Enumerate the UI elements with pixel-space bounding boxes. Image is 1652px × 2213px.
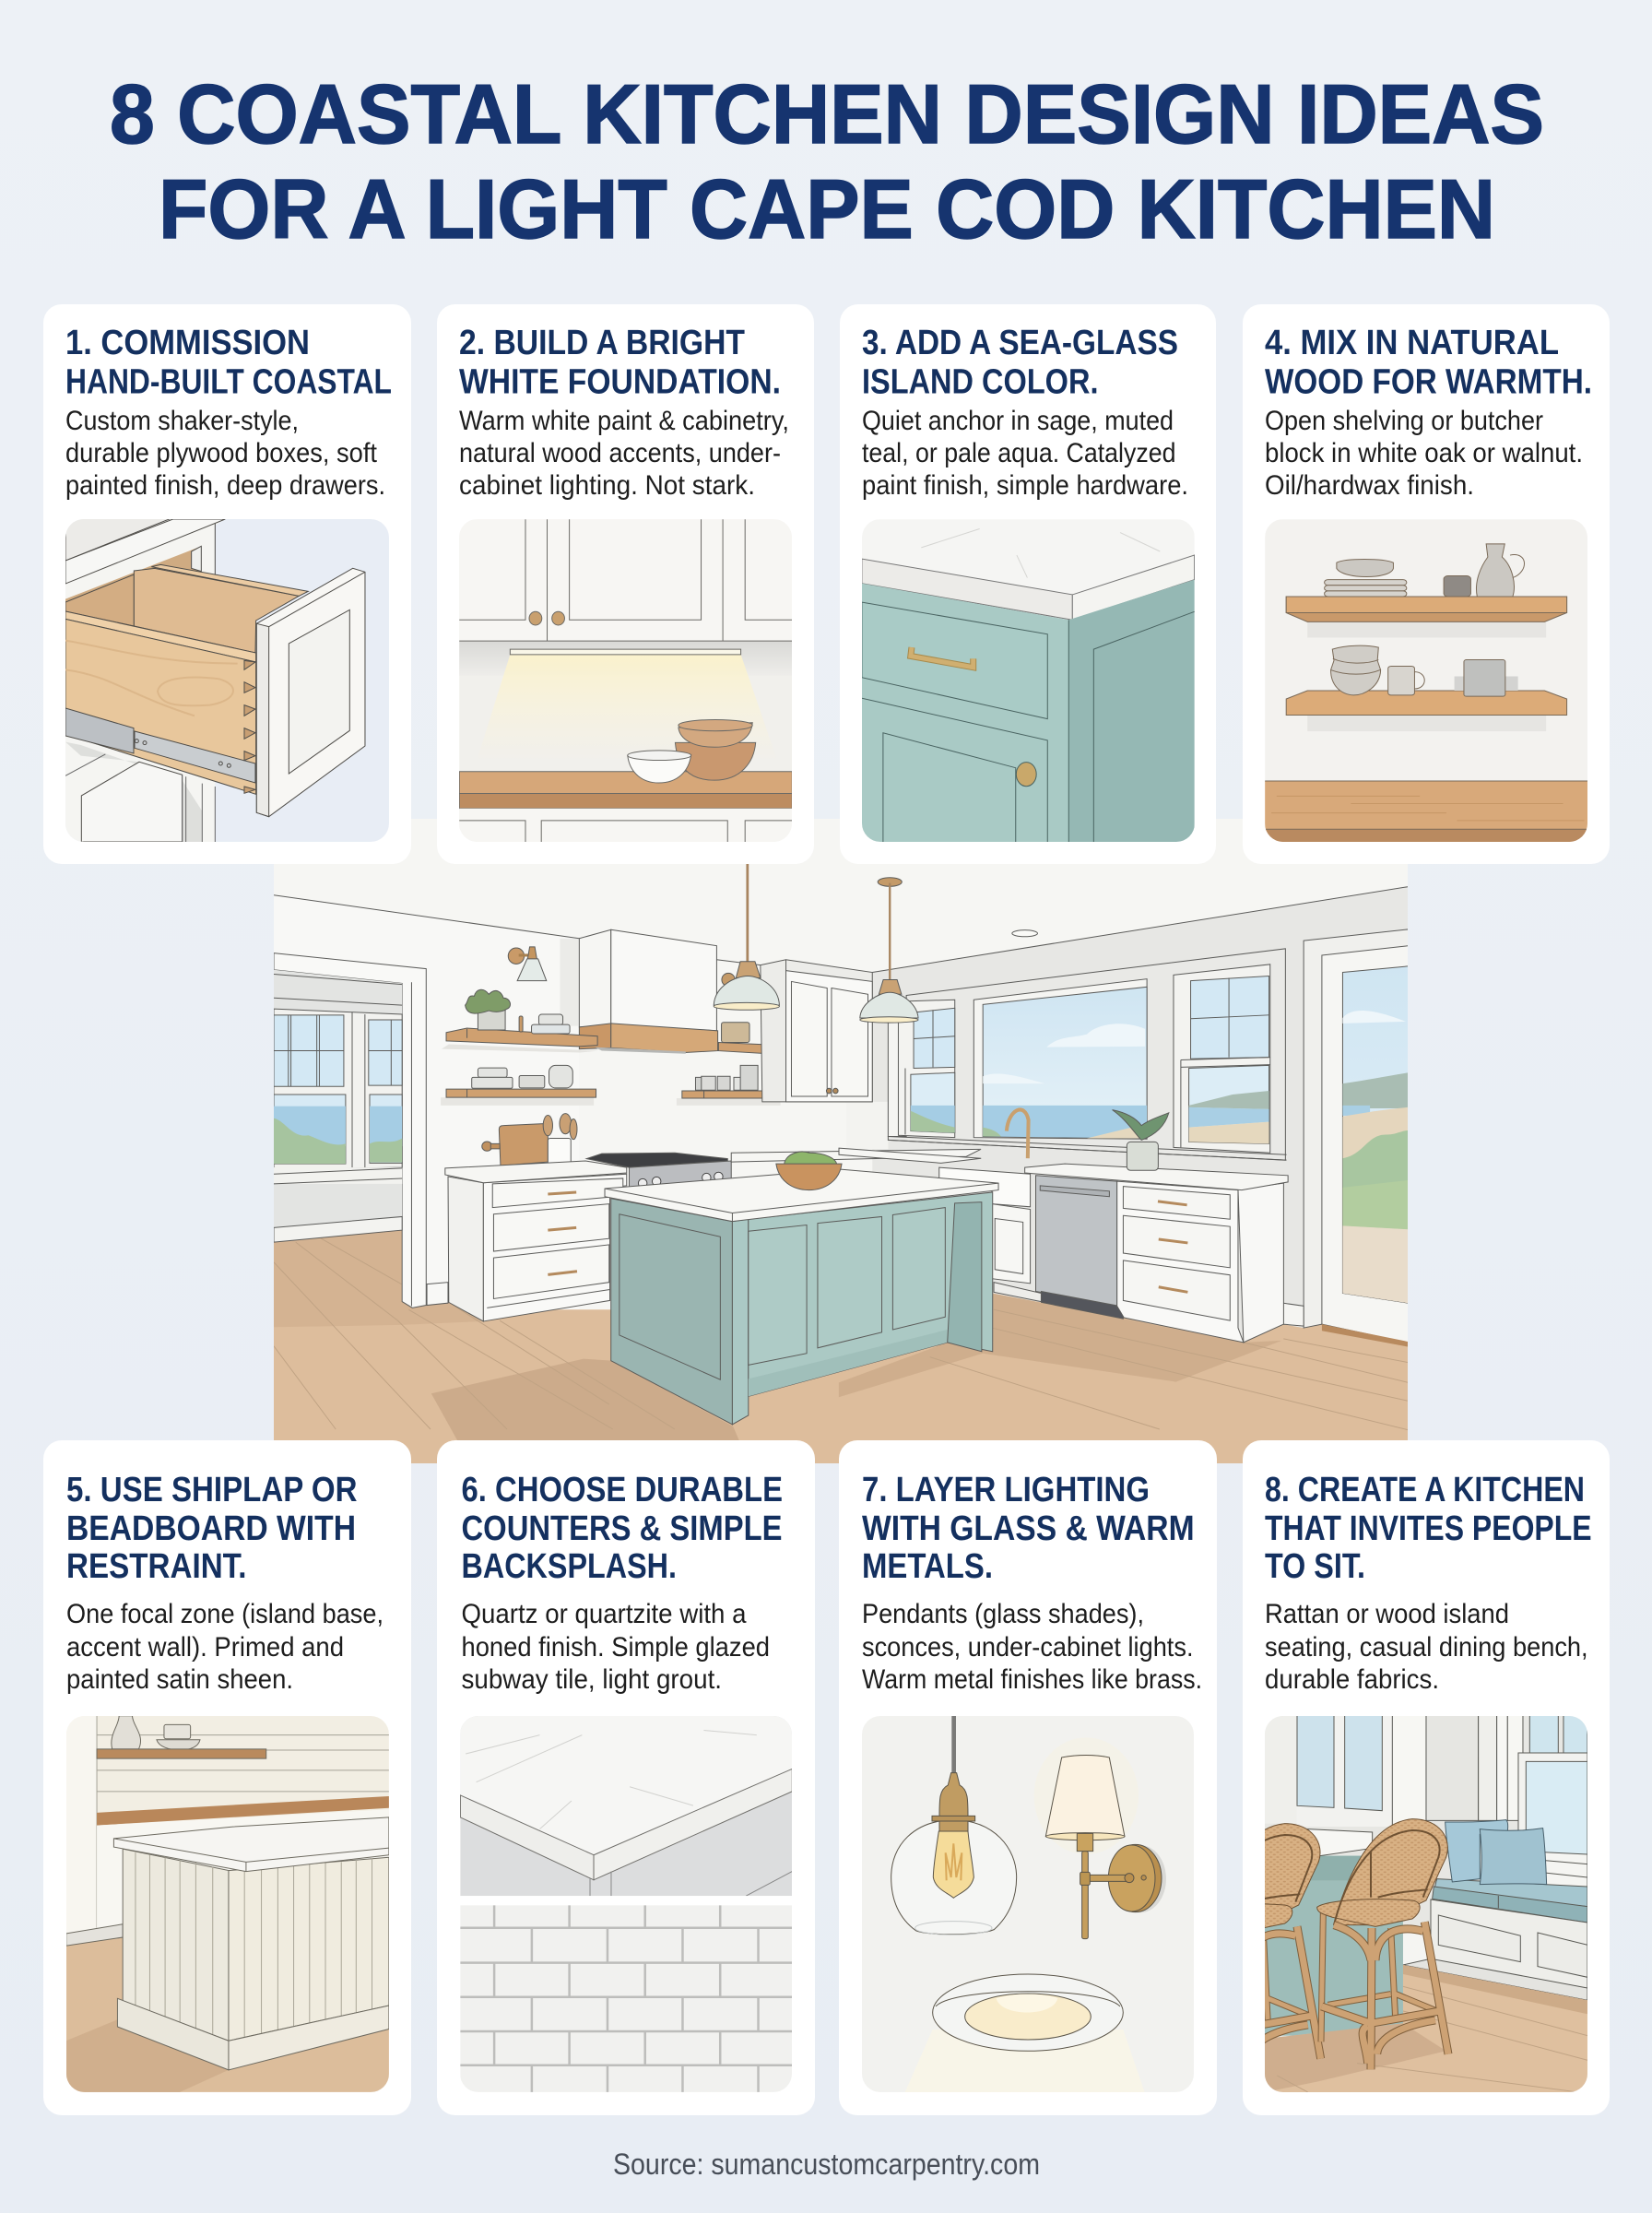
description: Warm metal finishes like brass. <box>862 1664 1202 1695</box>
description: Quiet anchor in sage, muted <box>862 406 1174 436</box>
back counter and sink <box>839 1148 1041 1302</box>
heading <box>1265 1471 1592 1586</box>
title <box>110 68 1544 256</box>
illustration: rattan stools and window bench <box>1189 1714 1587 2092</box>
description: block in white oak or walnut. <box>1265 438 1583 468</box>
left and back walls <box>274 894 761 1025</box>
panel: idea 7 <box>839 1440 1217 2115</box>
pendant light 1 <box>714 864 780 1011</box>
heading <box>459 324 781 402</box>
range <box>586 1153 731 1188</box>
panel: idea 4 <box>1243 304 1610 864</box>
heading: BACKSPLASH. <box>461 1547 677 1586</box>
description: Rattan or wood island <box>1265 1599 1509 1629</box>
description: Warm white paint & cabinetry, <box>459 406 789 436</box>
central kitchen illustration <box>274 814 1440 1477</box>
heading: 8. CREATE A KITCHEN <box>1265 1471 1585 1509</box>
description: painted satin sheen. <box>66 1664 293 1695</box>
heading: 6. CHOOSE DURABLE <box>461 1471 783 1509</box>
heading: ISLAND COLOR. <box>862 363 1099 402</box>
panel: idea 3 <box>840 304 1216 864</box>
cutting board and utensils <box>482 1114 577 1166</box>
sea-glass island <box>605 1169 998 1425</box>
description <box>459 406 789 501</box>
potted plant on shelf <box>466 989 511 1030</box>
illustration: wooden shelves <box>1265 519 1588 842</box>
heading: COUNTERS & SIMPLE <box>461 1509 782 1548</box>
illustration: sea-glass cabinet <box>862 519 1195 842</box>
brass faucet <box>1007 1109 1029 1158</box>
description <box>65 406 385 501</box>
recessed ceiling light <box>1012 930 1037 937</box>
baseboard <box>427 1283 448 1306</box>
right wall <box>872 887 1415 1348</box>
heading: METALS. <box>862 1547 993 1586</box>
description <box>862 406 1188 501</box>
heading: WHITE FOUNDATION. <box>459 363 781 402</box>
right base cabinets <box>1025 1164 1288 1343</box>
window alcove <box>274 953 426 1308</box>
description <box>862 1599 1202 1695</box>
back counter <box>731 1149 981 1162</box>
title: FOR A LIGHT CAPE COD KITCHEN <box>159 163 1495 256</box>
left base cabinets <box>445 1161 627 1321</box>
left sash window <box>888 1000 955 1138</box>
description: Open shelving or butcher <box>1265 406 1543 436</box>
description: painted finish, deep drawers. <box>65 470 385 501</box>
heading <box>65 324 392 402</box>
heading: 1. COMMISSION <box>65 324 310 362</box>
description: Oil/hardwax finish. <box>1265 470 1474 501</box>
heading: WITH GLASS & WARM <box>862 1509 1195 1548</box>
heading: BEADBOARD WITH <box>66 1509 356 1548</box>
description: accent wall). Primed and <box>66 1632 344 1663</box>
description: seating, casual dining bench, <box>1265 1632 1588 1663</box>
panel: idea 8 <box>1189 1440 1610 2115</box>
description: paint finish, simple hardware. <box>862 470 1188 501</box>
corner wall beside sink <box>872 1102 889 1149</box>
heading <box>862 324 1178 402</box>
illustration: under-cabinet light <box>459 519 792 842</box>
panel: idea 2 <box>437 304 814 864</box>
description: Custom shaker-style, <box>65 406 299 436</box>
panel: idea 6 <box>437 1440 815 2115</box>
description: durable fabrics. <box>1265 1664 1439 1695</box>
description: sconces, under-cabinet lights. <box>862 1632 1193 1663</box>
description <box>66 1599 384 1695</box>
description: Pendants (glass shades), <box>862 1599 1144 1629</box>
heading: 4. MIX IN NATURAL <box>1265 324 1559 362</box>
illustration: lighting fixtures <box>862 1716 1194 2092</box>
description: subway tile, light grout. <box>461 1664 722 1695</box>
heading: WOOD FOR WARMTH. <box>1265 363 1592 402</box>
glass door with beach view <box>1283 929 1415 1347</box>
heading: 2. BUILD A BRIGHT <box>459 324 745 362</box>
panel: idea 5 <box>43 1440 411 2115</box>
description: teal, or pale aqua. Catalyzed <box>862 438 1176 468</box>
open wood shelves <box>441 1028 781 1106</box>
heading: RESTRAINT. <box>66 1547 247 1586</box>
description: natural wood accents, under- <box>459 438 781 468</box>
panel: idea 1 <box>43 304 411 864</box>
description <box>1265 1599 1588 1695</box>
fruit bowl <box>776 1152 842 1190</box>
description: durable plywood boxes, soft <box>65 438 378 468</box>
description: Quartz or quartzite with a <box>461 1599 747 1629</box>
heading <box>461 1471 783 1586</box>
description <box>461 1599 770 1695</box>
description <box>1265 406 1583 501</box>
wood floor <box>274 1230 1440 1477</box>
shelf dishes <box>472 1014 758 1090</box>
dishwasher <box>1036 1176 1123 1319</box>
description: honed finish. Simple glazed <box>461 1632 770 1663</box>
window surround <box>888 949 1285 1160</box>
description: One focal zone (island base, <box>66 1599 384 1629</box>
potted fern <box>1113 1110 1169 1170</box>
illustration: quartz counter and subway tile <box>460 1716 792 2092</box>
right double-hung window <box>888 964 1287 1160</box>
heading: 5. USE SHIPLAP OR <box>66 1471 358 1509</box>
heading <box>862 1471 1195 1586</box>
description: cabinet lighting. Not stark. <box>459 470 755 501</box>
source line: Source: sumancustomcarpentry.com <box>613 2148 1040 2181</box>
heading: HAND-BUILT COASTAL <box>65 363 392 402</box>
upper cabinet <box>761 960 872 1102</box>
heading: 7. LAYER LIGHTING <box>862 1471 1150 1509</box>
title: 8 COASTAL KITCHEN DESIGN IDEAS <box>110 68 1544 161</box>
heading: THAT INVITES PEOPLE <box>1265 1509 1592 1548</box>
heading: TO SIT. <box>1265 1547 1365 1586</box>
range hood <box>579 929 718 1054</box>
main picture window <box>974 979 1147 1139</box>
pendant light 2 <box>860 878 918 1023</box>
illustration: open dovetail drawer <box>65 517 389 842</box>
heading: 3. ADD A SEA-GLASS <box>862 324 1178 362</box>
heading <box>66 1471 358 1586</box>
illustration: beadboard island <box>66 1716 389 2092</box>
brass wall sconce <box>508 947 547 981</box>
heading <box>1265 324 1592 402</box>
